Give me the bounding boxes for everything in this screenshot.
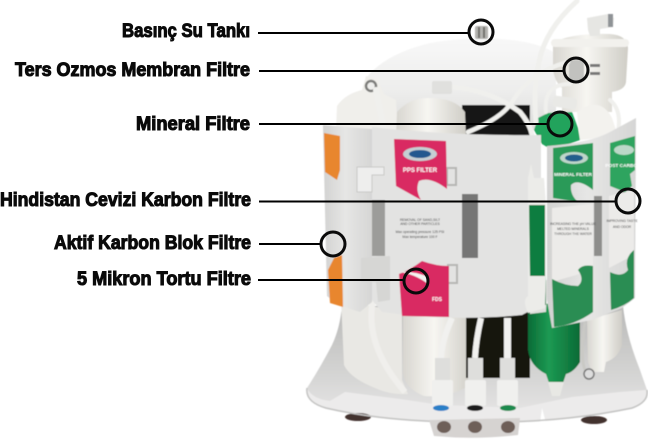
- right fine print: THROUGH THE WATER: [554, 232, 592, 236]
- post carbon label: [605, 136, 641, 192]
- marker: sediment: [404, 269, 428, 293]
- orange label top: [324, 133, 340, 180]
- upper filter caps and dark window: [336, 76, 618, 150]
- PPS filter label: PPS FILTER: [403, 168, 438, 174]
- bottom base tray: [307, 306, 647, 424]
- marker: coconut carbon: [616, 189, 640, 213]
- PPS filter label: [394, 139, 447, 200]
- label: Aktif Karbon Blok Filtre: Aktif Karbon Blok Filtre: [54, 233, 251, 254]
- lower filters: [341, 300, 622, 396]
- water connectors: [432, 318, 518, 411]
- pointer line: [259, 70, 565, 72]
- pointer line: [259, 200, 617, 202]
- tank valve: [475, 26, 488, 39]
- marker: active carbon: [321, 232, 345, 256]
- orange label bottom: [328, 255, 343, 307]
- pointer line: [258, 32, 470, 34]
- right panels: [547, 118, 636, 328]
- pressure tank dome: [366, 38, 556, 130]
- marker: membrane: [564, 58, 588, 82]
- panel fine print: AND OTHER PARTICLES: [400, 222, 440, 226]
- post carbon label: POST CARBON: [605, 163, 641, 169]
- panel fine print: REMOVAL OF SAND,SILT: [400, 218, 440, 222]
- right fine print: IMPROVING TASTE: [607, 219, 638, 223]
- pink label bottom: FDS: [432, 297, 443, 303]
- label: Hindistan Cevizi Karbon Filtre: Hindistan Cevizi Karbon Filtre: [0, 190, 251, 211]
- center panel: [357, 127, 548, 318]
- panel fine print: [396, 218, 444, 239]
- membrane filter housing: [551, 14, 629, 112]
- label: 5 Mikron Tortu Filtre: 5 Mikron Tortu Filtre: [77, 269, 251, 290]
- port block: [429, 418, 520, 438]
- right fine print: MELTED MINERALS: [557, 227, 590, 231]
- right fine print: [550, 219, 638, 236]
- pointer line: [259, 243, 322, 245]
- label: Basınç Su Tankı: Basınç Su Tankı: [122, 21, 250, 42]
- green label bottom: [552, 266, 593, 327]
- label: Ters Ozmos Membran Filtre: Ters Ozmos Membran Filtre: [15, 60, 250, 81]
- pointer line: [258, 279, 404, 281]
- green label bottom right: [610, 250, 634, 310]
- mineral filter label: [553, 143, 593, 202]
- small tube elbows: [432, 81, 578, 110]
- white tubing: [376, 1, 619, 135]
- pointer line: [259, 123, 549, 125]
- right fine print: INCREASING THE pH VALUE: [550, 222, 597, 226]
- green filter column: [528, 205, 546, 305]
- right fine print: AND ODOR: [613, 225, 632, 229]
- water purifier photo illustration: [307, 1, 647, 438]
- pink label bottom: [399, 261, 449, 317]
- mineral filter label: MINERAL FILTER: [554, 172, 593, 177]
- panel fine print: Max temperature 100 F: [402, 235, 438, 239]
- marker: tank valve: [469, 20, 493, 44]
- label: Mineral Filtre: Mineral Filtre: [136, 114, 250, 135]
- left panel: [323, 125, 372, 312]
- clip on green column: [525, 164, 546, 313]
- panel fine print: Max operating pressure 125 PSI: [396, 230, 444, 234]
- marker: mineral: [548, 112, 572, 136]
